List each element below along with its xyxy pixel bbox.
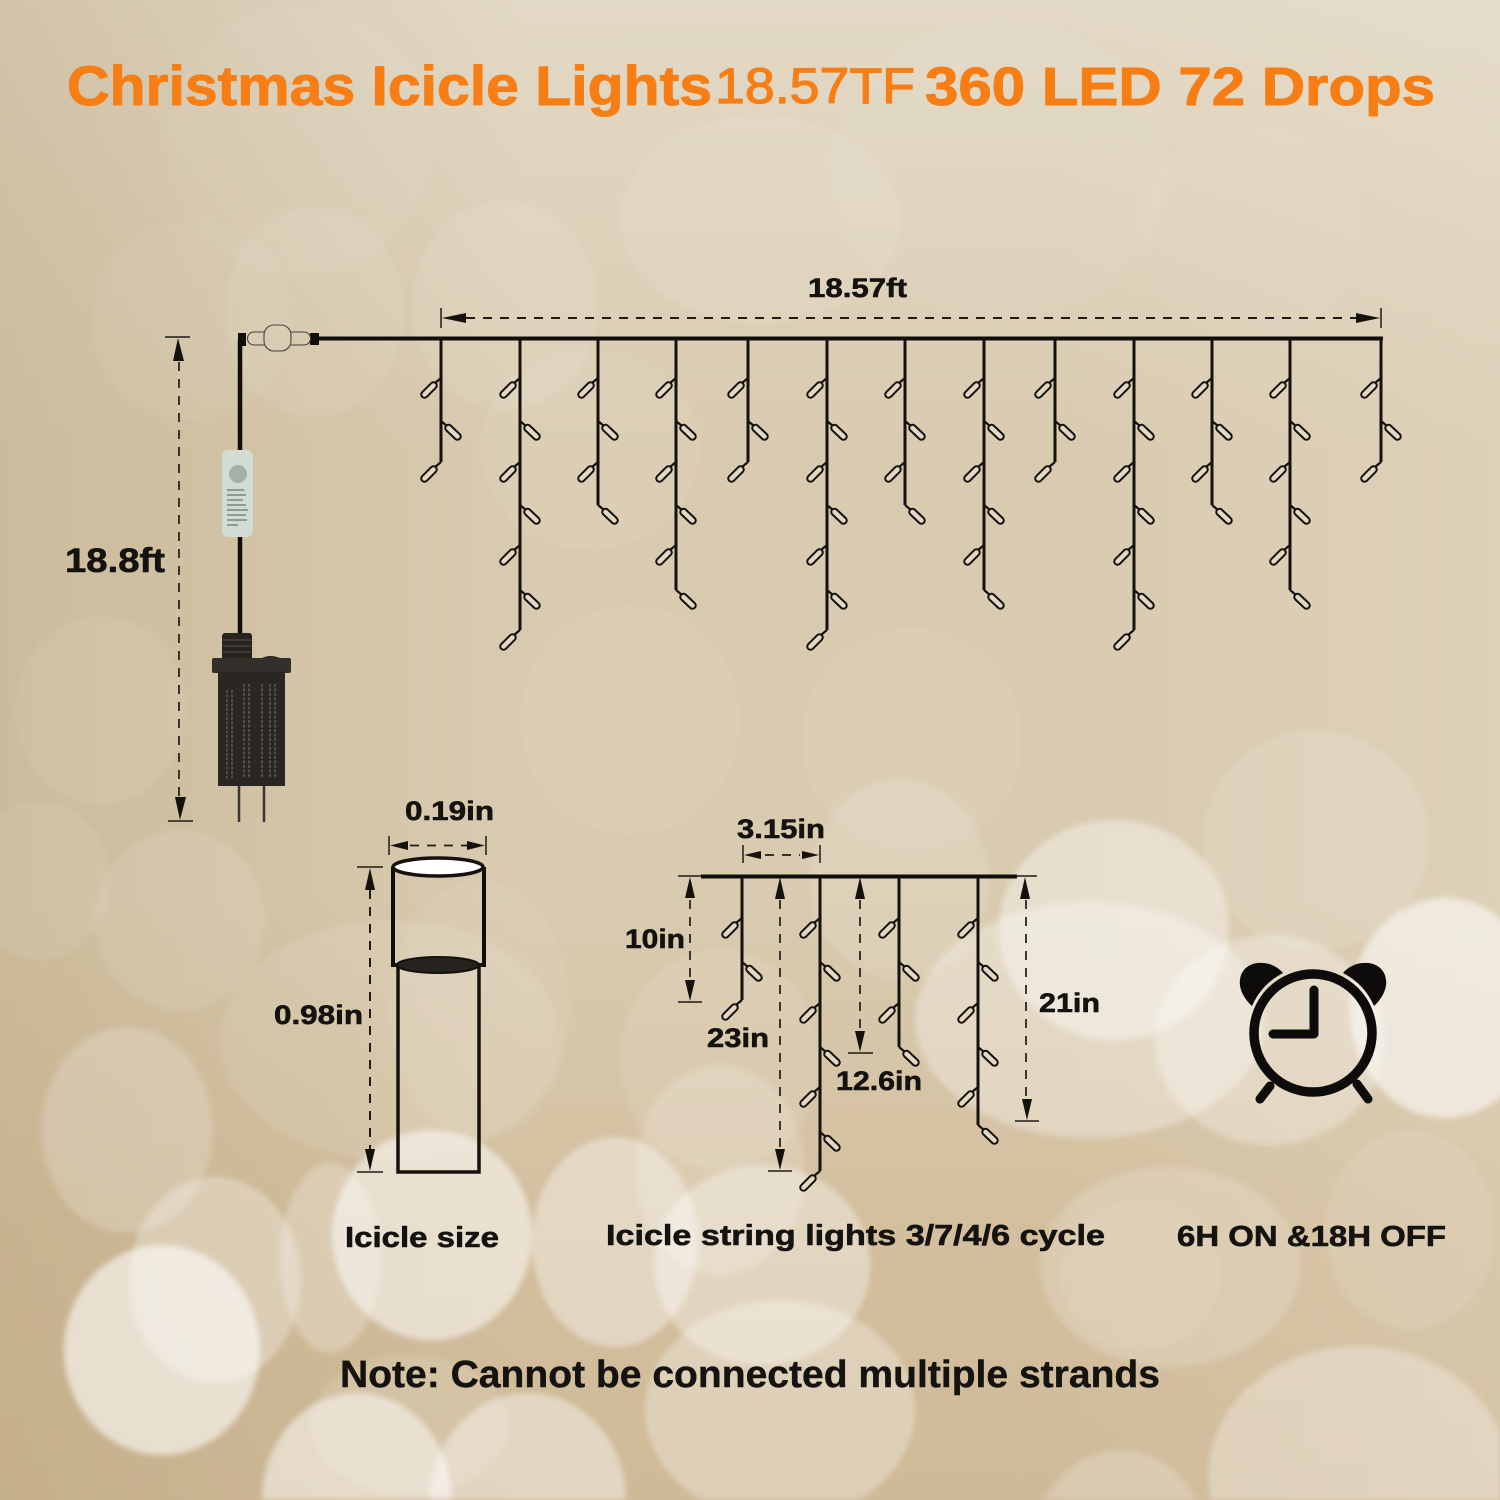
power cord <box>238 340 242 634</box>
icicle light string <box>318 338 1398 646</box>
dimension: 23in <box>707 877 792 1171</box>
caption: timer: 6H ON &18H OFF <box>1177 1221 1446 1253</box>
dimension: 12.6in <box>836 877 922 1096</box>
title: Christmas Icicle Lights <box>67 54 712 117</box>
note: Note: Cannot be connected multiple strands <box>340 1354 1160 1396</box>
controller box <box>222 450 253 537</box>
caption: icicle size: Icicle size <box>345 1222 499 1254</box>
icon: alarm clock <box>1240 963 1386 1099</box>
dimension: 21in <box>1015 877 1100 1121</box>
dimension: 23in: 23in <box>707 1023 769 1053</box>
dimension: 12.6in: 12.6in <box>836 1066 922 1096</box>
dimension: 10in: 10in <box>625 924 685 954</box>
dimension: 0.19in bulb width <box>389 796 494 855</box>
dimension: 0.19in bulb width: 0.19in <box>405 796 494 826</box>
dimension: 0.98in bulb height <box>274 867 383 1172</box>
power adapter <box>212 633 291 822</box>
dimension: 18.57ft width: 18.57ft <box>808 273 907 303</box>
cycle diagram strands <box>678 876 1037 1188</box>
caption: cycle: Icicle string lights 3/7/4/6 cycle <box>606 1220 1105 1252</box>
title: 18.57TF <box>715 58 915 114</box>
dimension: 10in <box>625 877 702 1002</box>
dimension: 21in: 21in <box>1039 988 1100 1018</box>
dimension: 0.98in bulb height: 0.98in <box>274 1000 363 1030</box>
dimension: 3.15in spacing <box>737 814 825 863</box>
dimension: 18.8ft cord length: 18.8ft <box>65 542 165 580</box>
title: 360 LED 72 Drops <box>925 57 1435 117</box>
connector plug <box>238 325 319 351</box>
dimension: 18.57ft width <box>441 273 1381 328</box>
icicle bulb size diagram <box>393 858 484 1172</box>
title <box>67 54 1435 117</box>
dimension: 3.15in spacing: 3.15in <box>737 814 825 844</box>
dimension: 18.8ft cord length <box>65 337 193 821</box>
